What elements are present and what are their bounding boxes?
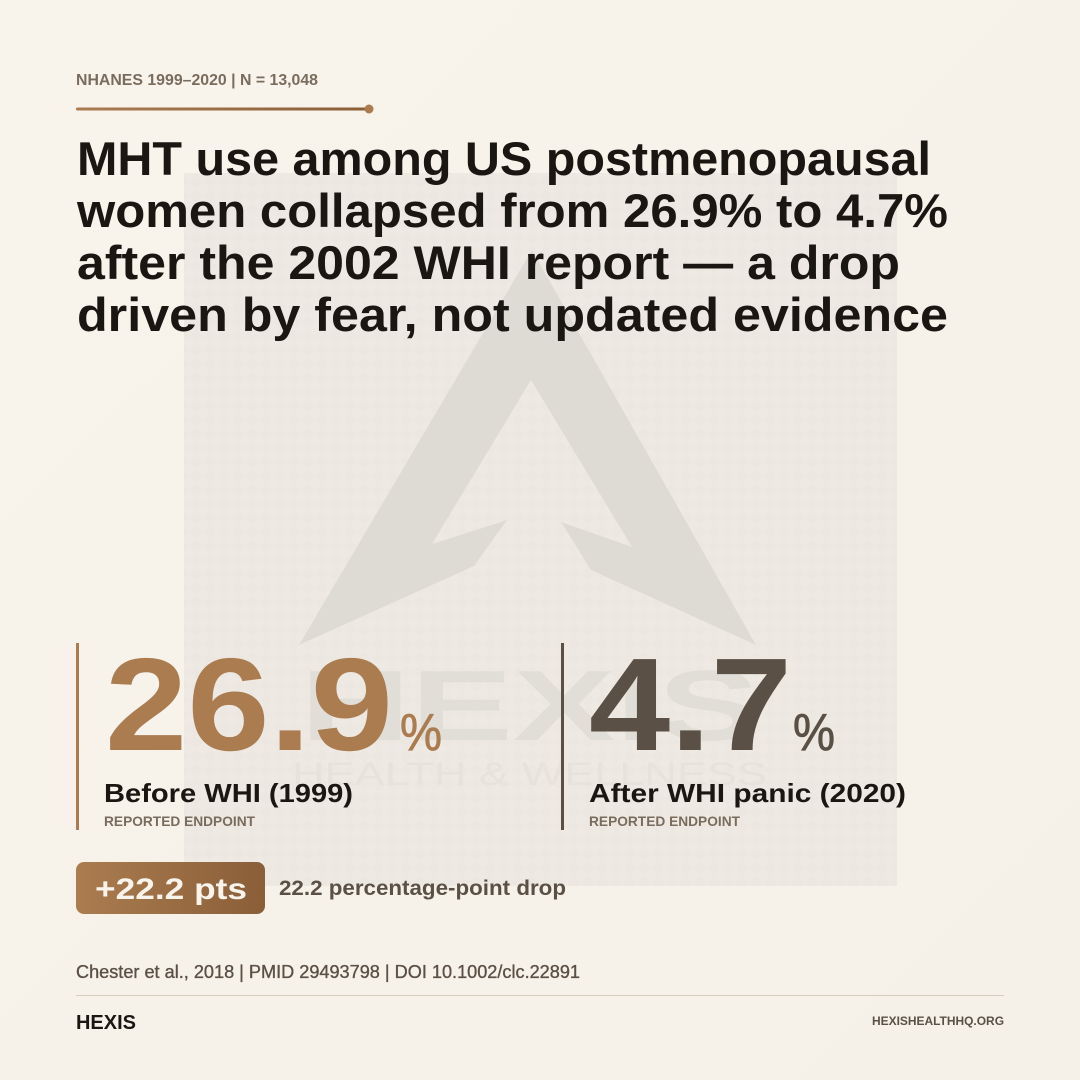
accent rule with dot xyxy=(76,104,374,114)
stat sublabel: REPORTED ENDPOINT xyxy=(104,813,255,829)
stat: after WHI xyxy=(561,631,906,830)
watermark: Hexis logo panel xyxy=(184,173,897,886)
eyebrow: study source: NHANES 1999–2020 | N = 13,048 xyxy=(76,72,318,89)
title xyxy=(76,132,948,341)
stat sublabel: REPORTED ENDPOINT xyxy=(589,813,740,829)
delta badge: +22.2 pts xyxy=(95,873,247,906)
delta description: 22.2 percentage-point drop xyxy=(279,877,566,900)
percent sign: % xyxy=(793,704,835,762)
footer url: HEXISHEALTHHQ.ORG xyxy=(872,1014,1004,1028)
title: driven by fear, not updated evidence xyxy=(77,288,948,341)
delta badge xyxy=(76,862,265,914)
stat: before WHI xyxy=(76,631,442,830)
watermark: A mark xyxy=(299,250,756,645)
footer brand: HEXIS xyxy=(76,1012,136,1034)
citation: Chester et al., 2018 | PMID 29493798 | DOI 10.1002/clc.22891 xyxy=(76,962,580,982)
stat label: Before WHI (1999) xyxy=(104,778,353,808)
title: women collapsed from 26.9% to 4.7% xyxy=(76,184,948,237)
stat value 26.9: 26.9 xyxy=(105,631,393,778)
title: after the 2002 WHI report — a drop xyxy=(77,236,900,289)
watermark: health and wellness: HEALTH & WELLNESS xyxy=(292,756,767,792)
percent sign: % xyxy=(400,704,442,762)
stat label: After WHI panic (2020) xyxy=(589,778,906,808)
title: MHT use among US postmenopausal xyxy=(77,132,931,185)
footer divider xyxy=(76,995,1004,996)
stat value 4.7: 4.7 xyxy=(589,631,792,778)
watermark: HEXIS wordmark: HEXIS xyxy=(300,650,760,762)
